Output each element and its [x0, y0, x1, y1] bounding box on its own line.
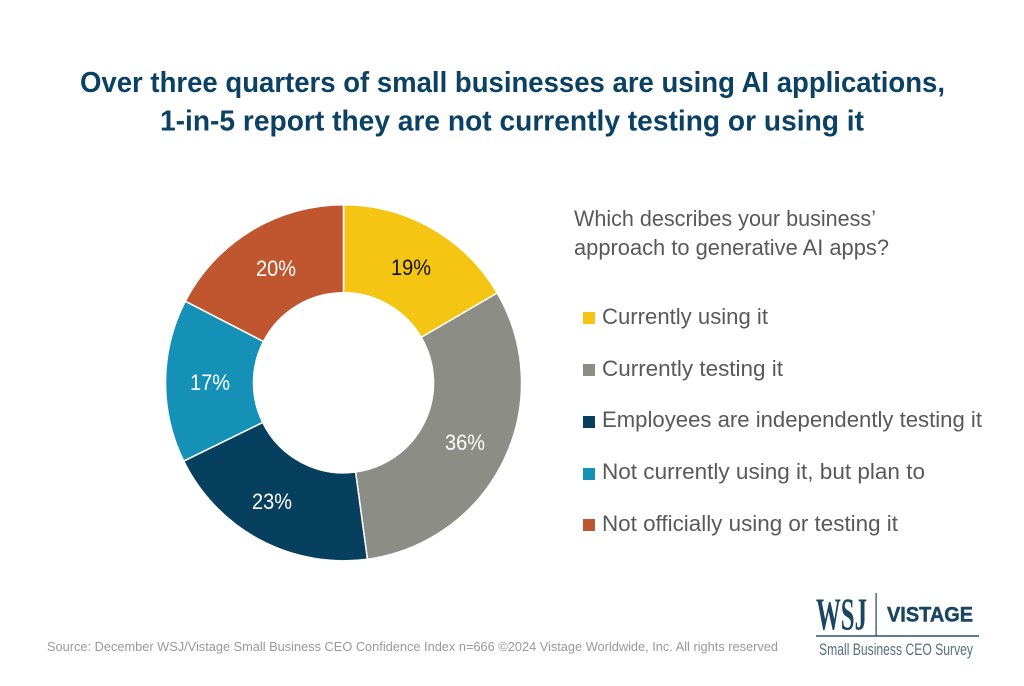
logo: WSJ Vistage: VISTAGE [887, 604, 973, 626]
title [80, 67, 945, 138]
donut value labels [190, 255, 485, 514]
legend item: plan to use: Not currently using it, but plan to [602, 459, 925, 484]
source note: Source: December WSJ/Vistage Small Business CEO Confidence Index n=666 ©2024 Vistage Worldwide, Inc. All rights reserved [47, 639, 778, 654]
value: 23%: 23% [252, 489, 292, 514]
value: 19%: 19% [391, 255, 431, 280]
segment: currently using 19% [344, 205, 497, 337]
donut chart [166, 205, 522, 561]
logo: WSJ Vistage: WSJ [816, 588, 867, 640]
logo: WSJ Vistage [816, 588, 979, 659]
value: 36%: 36% [445, 430, 485, 455]
legend item: currently testing it: Currently testing it [602, 356, 783, 381]
title: 1-in-5 report they are not currently testing or using it [160, 106, 864, 138]
segment: currently testing 36% [356, 293, 522, 559]
logo: WSJ Vistage: Small Business CEO Survey [819, 641, 974, 659]
title: Over three quarters of small businesses are using AI applications, [80, 67, 945, 99]
segment: employees testing 23% [184, 422, 367, 561]
legend question: Which describes your business’ [574, 206, 876, 231]
legend item: employees independently testing: Employees are independently testing it [602, 407, 982, 432]
legend question: approach to generative AI apps? [574, 235, 889, 260]
value: 20%: 20% [256, 256, 296, 281]
legend question [574, 206, 889, 260]
legend item: not officially using: Not officially using or testing it [602, 511, 898, 536]
segment: plan to use 17% [166, 301, 264, 461]
legend [583, 304, 982, 536]
value: 17%: 17% [190, 370, 230, 395]
legend item: currently using it: Currently using it [602, 304, 768, 329]
segment: not using 20% [185, 205, 344, 342]
